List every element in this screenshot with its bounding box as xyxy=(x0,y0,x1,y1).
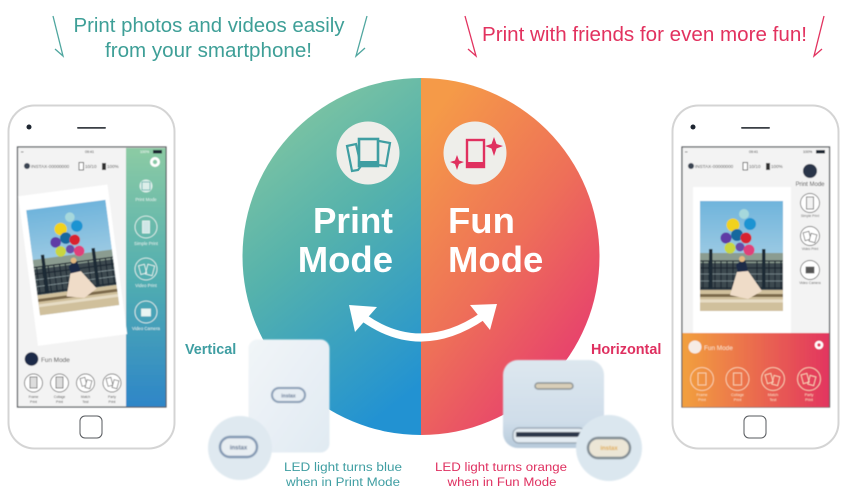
status bar: 09:41 xyxy=(749,150,758,154)
arrow: mode switch double arrow xyxy=(349,304,497,338)
fun mode icon labels xyxy=(29,395,116,404)
phone screen: Video Camera xyxy=(799,281,821,285)
caption: print mode LED: LED light turns blue xyxy=(284,460,402,474)
title: fun mode: Mode xyxy=(448,239,543,280)
printer LED button xyxy=(272,388,305,402)
caption: fun mode LED xyxy=(435,460,567,489)
fun mode icon labels: Print xyxy=(109,400,116,404)
fun mode icon labels: Party xyxy=(108,395,116,399)
connection info: 100% xyxy=(771,164,783,169)
fun mode icon labels: Test xyxy=(82,400,89,404)
fun mode panel labels: Print xyxy=(734,398,742,402)
status bar: ▪▪ xyxy=(685,150,688,154)
printer: vertical xyxy=(248,340,330,452)
arrow: right heading right xyxy=(814,16,824,56)
icon: fun mode phone with sparkles xyxy=(444,122,506,184)
side menu labels: Video Print xyxy=(135,283,157,288)
label: vertical: Vertical xyxy=(185,342,236,358)
phone camera xyxy=(26,124,32,130)
detail: horizontal printer LED: instax xyxy=(600,446,618,452)
heading: print mode xyxy=(74,15,344,62)
printer: vertical: instax xyxy=(281,394,296,400)
fun mode icon labels: Collage xyxy=(54,395,65,399)
fun mode label xyxy=(25,352,38,366)
caption: fun mode LED: when in Fun Mode xyxy=(446,475,557,489)
caption: fun mode LED: LED light turns orange xyxy=(435,460,567,474)
printer: horizontal xyxy=(503,360,604,448)
title: print mode xyxy=(298,200,393,280)
connection info xyxy=(688,162,783,170)
phone screen: Print Mode xyxy=(795,182,825,188)
caption: print mode LED: when in Print Mode xyxy=(285,475,400,489)
fun mode panel labels: Print xyxy=(805,398,814,402)
side menu labels: Simple Print xyxy=(134,241,159,246)
print mode menu xyxy=(803,164,817,178)
status bar xyxy=(21,150,150,154)
fun mode panel labels: Match xyxy=(768,393,778,397)
fun mode icon labels: Print xyxy=(56,400,63,404)
heading: fun mode: Print with friends for even more fun! xyxy=(482,24,807,46)
status bar xyxy=(685,150,813,154)
arrow: left heading right xyxy=(356,16,367,56)
printer LED xyxy=(535,383,573,389)
heading: print mode: Print photos and videos easily xyxy=(74,15,344,37)
fun mode panel labels xyxy=(697,393,814,402)
status bar: 100% xyxy=(140,150,150,154)
heading: print mode: from your smartphone! xyxy=(105,40,312,62)
detail: horizontal printer LED xyxy=(576,415,642,481)
title: print mode: Print xyxy=(313,200,393,241)
fun mode panel labels: Frame xyxy=(697,393,707,397)
side menu labels: Video Camera xyxy=(132,326,161,331)
arrow: left heading left xyxy=(53,16,63,56)
status bar: ▪▪ xyxy=(21,150,24,154)
status bar: 09:41 xyxy=(85,150,94,154)
phone: fun mode xyxy=(672,106,838,448)
connection info: INSTAX-00000000 xyxy=(695,164,734,169)
phone screen xyxy=(682,147,830,407)
fun mode icon labels: Match xyxy=(81,395,90,399)
phone body xyxy=(8,106,174,448)
caption: print mode LED xyxy=(284,460,402,489)
detail: vertical printer LED xyxy=(208,416,272,480)
circle: fun half xyxy=(421,78,600,435)
fun mode panel labels: Test xyxy=(770,398,777,402)
phone speaker xyxy=(77,127,106,129)
fun mode panel labels: Party xyxy=(805,393,814,397)
fun mode panel icons xyxy=(690,368,820,390)
connection info: 10/10 xyxy=(749,164,761,169)
fun mode panel labels: Collage xyxy=(731,393,744,397)
connection info: INSTAX-00000000 xyxy=(31,164,70,169)
fun mode panel header xyxy=(688,340,702,354)
title: print mode: Mode xyxy=(298,239,393,280)
connection info xyxy=(24,162,119,170)
fun mode icon labels: Frame xyxy=(29,395,39,399)
detail: vertical printer LED: instax xyxy=(230,446,248,452)
label: horizontal: Horizontal xyxy=(591,342,661,358)
phone home button xyxy=(744,416,766,438)
fun mode icon labels: Print xyxy=(30,400,37,404)
settings gear xyxy=(151,158,159,166)
icon: print mode photos xyxy=(336,122,400,184)
instant print with photo xyxy=(18,184,127,346)
arrow: right heading left xyxy=(465,16,476,56)
connection info: 100% xyxy=(107,164,119,169)
phone screen xyxy=(18,147,166,407)
circle: print half xyxy=(242,78,421,435)
phone screen: Simple Print xyxy=(801,214,819,218)
phone camera xyxy=(690,124,696,130)
fun mode icons xyxy=(24,374,121,392)
instant print with photo xyxy=(693,187,791,334)
phone screen: Fun Mode xyxy=(704,345,733,352)
title: fun mode xyxy=(448,200,543,280)
fun mode panel xyxy=(682,333,829,407)
phone body xyxy=(672,106,838,448)
side menu labels xyxy=(132,197,161,331)
side menu labels: Print Mode xyxy=(135,197,157,202)
printer paper slot xyxy=(513,428,585,443)
central mode circle xyxy=(242,78,600,435)
phone screen: Video Print xyxy=(802,247,818,251)
side menu xyxy=(126,148,166,406)
side menu icons xyxy=(135,180,157,323)
phone: print mode xyxy=(8,106,174,448)
connection info: 10/10 xyxy=(85,164,97,169)
status bar: 100% xyxy=(803,150,813,154)
phone speaker xyxy=(741,127,770,129)
phone screen: Fun Mode xyxy=(41,357,70,364)
phone home button xyxy=(80,416,102,438)
title: fun mode: Fun xyxy=(448,200,515,241)
fun mode panel labels: Print xyxy=(698,398,707,402)
